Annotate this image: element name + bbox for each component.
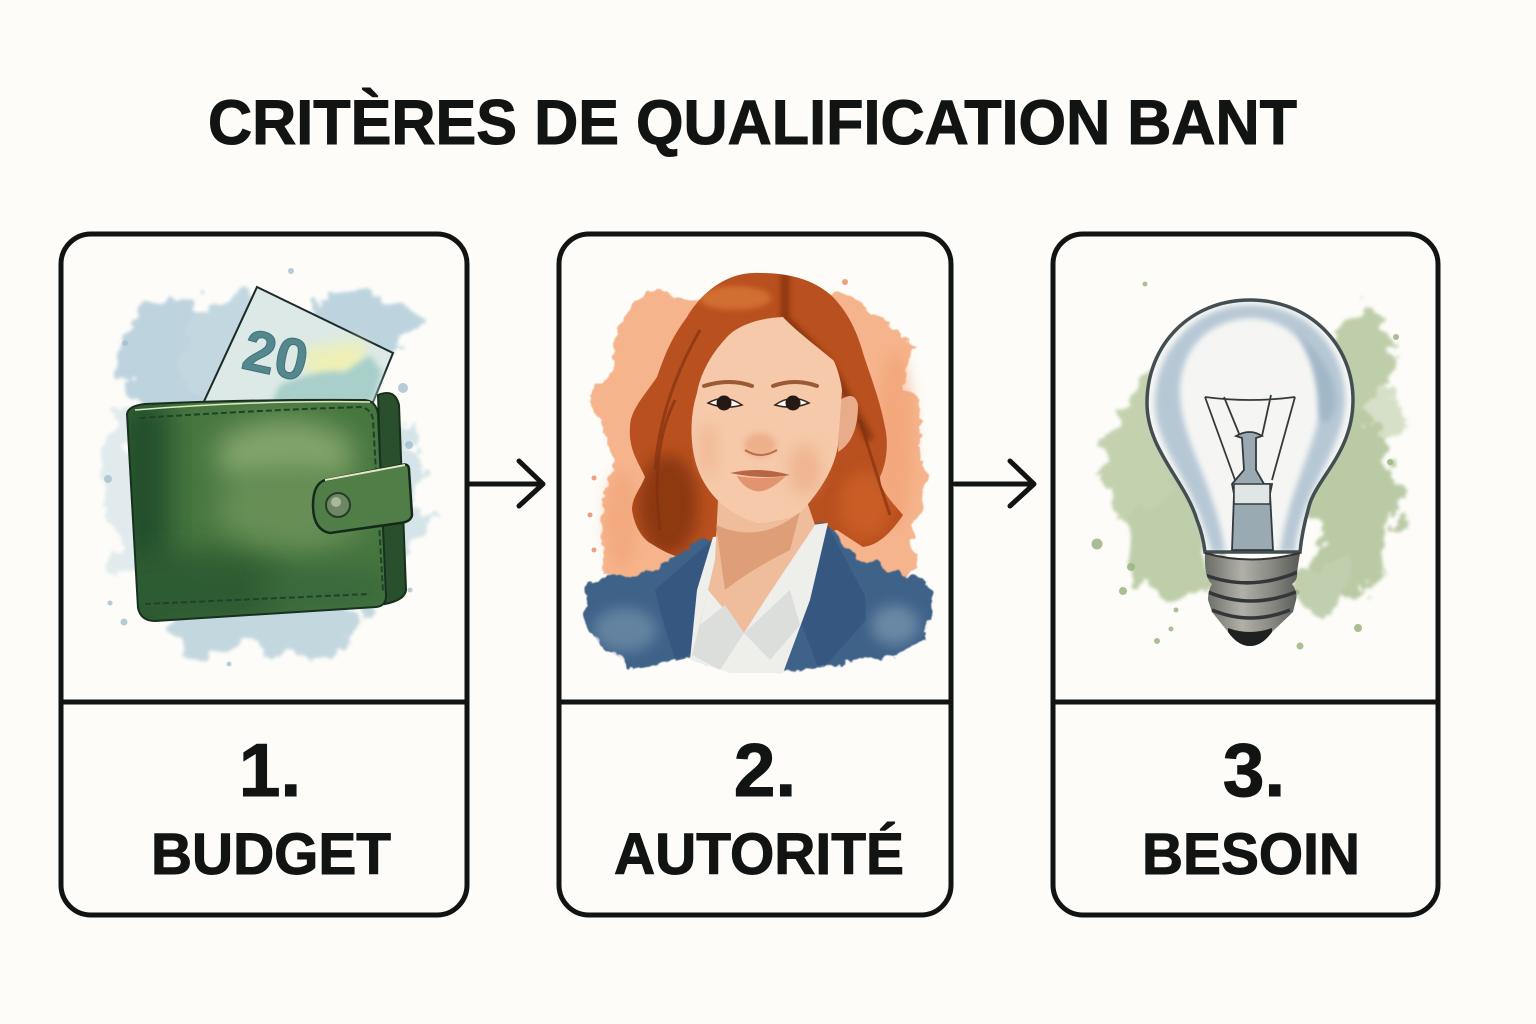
panel: besoin (1053, 234, 1438, 915)
panel: budget (61, 234, 467, 915)
filament and stem (1205, 395, 1295, 480)
label: 1. budget: 1. (239, 728, 301, 812)
wallet front (128, 400, 385, 620)
label: 3. besoin (1142, 728, 1360, 887)
title: CRITÈRES DE QUALIFICATION BANT (208, 88, 1297, 158)
glass stem (1232, 432, 1273, 550)
wallet back (378, 393, 406, 604)
label: 2. autorité: 2. (734, 728, 796, 812)
orange wash (590, 290, 925, 590)
label: 3. besoin: BESOIN (1142, 822, 1360, 887)
icon: wallet with banknote (80, 268, 420, 666)
icon: light bulb (1092, 282, 1405, 650)
bulb screw base (1204, 554, 1300, 646)
panel: autorité (559, 234, 951, 915)
label: 3. besoin: 3. (1223, 728, 1285, 812)
blazer (583, 523, 932, 673)
label: 1. budget (151, 728, 391, 887)
label: 1. budget: BUDGET (151, 822, 391, 887)
hair (630, 272, 903, 556)
face (691, 317, 842, 523)
wallet clasp (313, 465, 412, 533)
label: 2. autorité (614, 728, 904, 887)
stem collar (1234, 484, 1270, 504)
ear (838, 396, 858, 452)
icon: portrait of a woman (583, 265, 932, 673)
arrow: budget to autorité (470, 461, 543, 506)
banknote value: 20 (237, 317, 314, 394)
bulb glass (1147, 300, 1353, 552)
shirt collar (692, 590, 800, 670)
arrow: autorité to besoin (955, 461, 1034, 506)
shirt (690, 523, 828, 673)
chest and neck (708, 490, 815, 633)
facial features (704, 382, 817, 386)
label: 2. autorité: AUTORITÉ (614, 822, 904, 887)
